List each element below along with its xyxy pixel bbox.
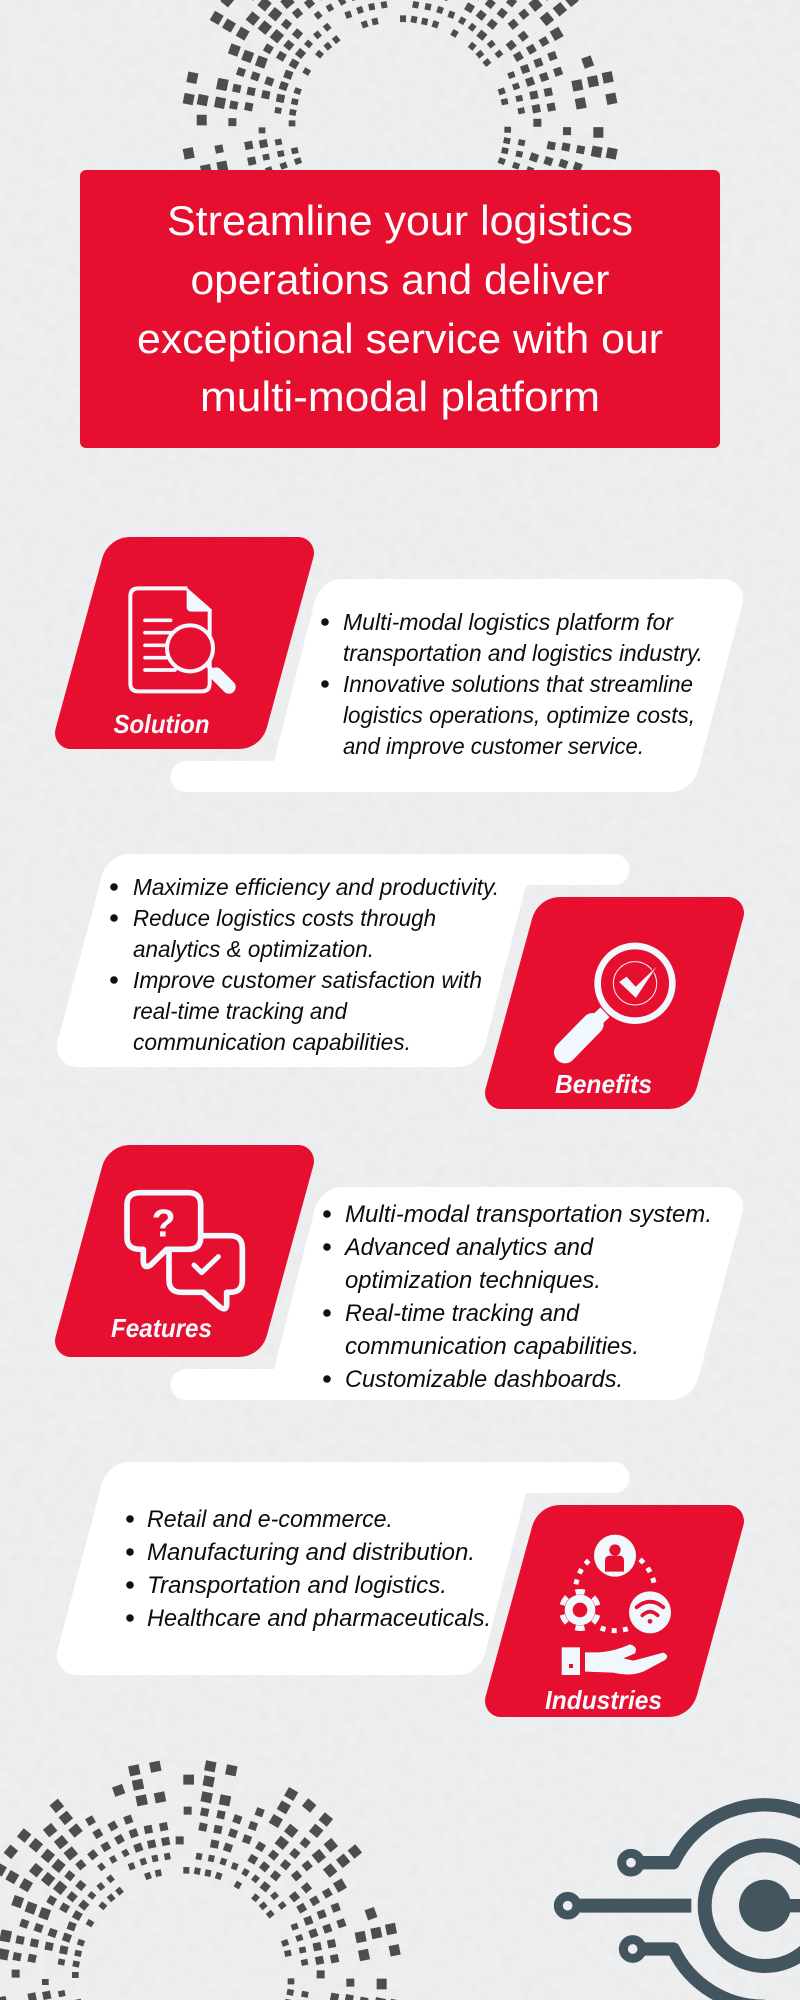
panel: industries [57,1462,744,1717]
icon: magnifier with check [565,946,672,1052]
industries text card: Healthcare and pharmaceuticals. [147,1605,491,1632]
industries text card: Transportation and logistics. [147,1572,447,1599]
benefits text card: Maximize efficiency and productivity. [133,874,499,900]
features text card: communication capabilities. [345,1333,639,1360]
solution text card: transportation and logistics industry. [343,640,703,666]
industries label: Industries [545,1685,662,1715]
top dot ring decoration [184,0,617,172]
solution text card: and improve customer service. [343,733,644,759]
solution red tile [55,537,314,749]
benefits label: Benefits [555,1069,652,1099]
features text card: Customizable dashboards. [345,1366,623,1393]
features text card [170,1187,743,1400]
title banner: multi-modal platform [200,373,600,420]
icon: chat bubbles: ? [152,1202,176,1246]
features text card: Advanced analytics and [343,1234,594,1261]
solution text card: Multi-modal logistics platform for [343,609,674,635]
features red tile [55,1145,314,1357]
title banner: operations and deliver [190,256,610,303]
title banner: exceptional service with our [137,315,663,362]
title banner: Streamline your logistics [167,197,633,244]
benefits red tile [485,897,744,1109]
panel: benefits [57,854,744,1109]
icon: chat bubbles [127,1193,242,1309]
industries text card: Manufacturing and distribution. [147,1539,475,1566]
solution label: Solution [114,709,210,739]
features text card: Real-time tracking and [345,1300,580,1327]
benefits text card: Reduce logistics costs through [133,905,436,931]
benefits text card: analytics & optimization. [133,936,374,962]
benefits text card: real-time tracking and [133,998,348,1024]
panel: features [55,1145,743,1400]
icon: circuit target [558,1805,800,2000]
features text card: Multi-modal transportation system. [345,1201,712,1228]
industries red tile [485,1505,744,1717]
industries text card: Retail and e-commerce. [147,1506,393,1533]
bottom dot ring decoration [0,1761,400,2000]
icon: connected network and hand [562,1535,671,1675]
solution text card [170,579,743,792]
benefits text card [57,854,630,1067]
industries text card [57,1462,630,1675]
icon: document with magnifier [130,587,229,691]
title banner [80,170,720,448]
solution text card: Innovative solutions that streamline [343,671,693,697]
features text card: optimization techniques. [345,1267,601,1294]
benefits text card: communication capabilities. [133,1029,411,1055]
panel: solution [55,537,743,792]
solution text card: logistics operations, optimize costs, [343,702,695,728]
benefits text card: Improve customer satisfaction with [133,967,482,993]
features label: Features [111,1313,212,1343]
